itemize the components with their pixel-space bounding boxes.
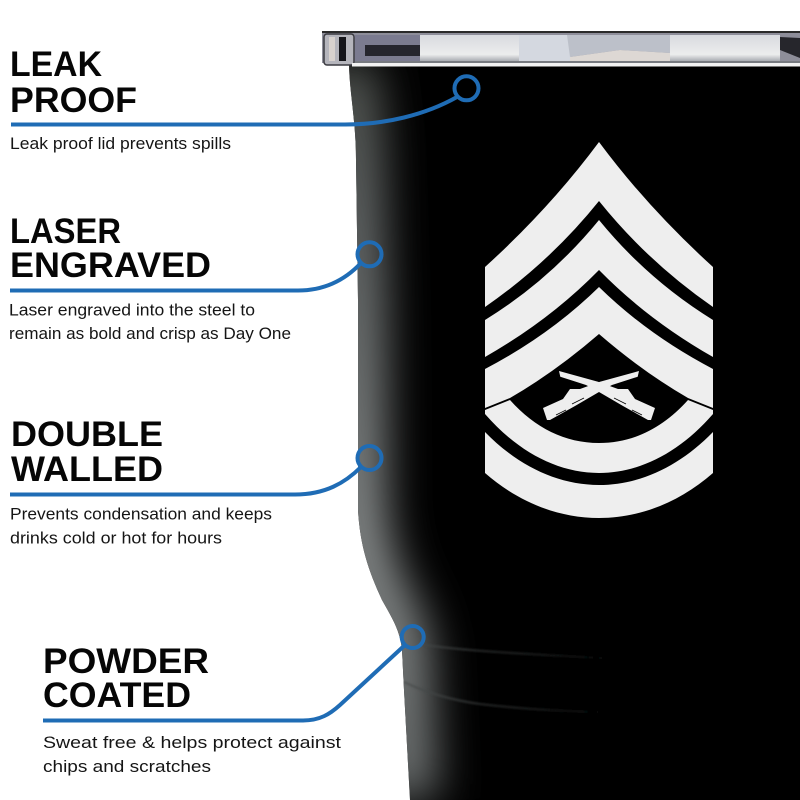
chevron 2 [485, 220, 713, 357]
chevron insignia [485, 142, 713, 518]
text: laser engraved: Laser engraved into the steel to [9, 302, 255, 320]
arc 1 [485, 400, 713, 473]
callout: double walled [10, 415, 382, 548]
text: laser engraved [9, 302, 291, 343]
chevron 3 [485, 287, 713, 408]
marker: leak proof [454, 76, 478, 100]
heading: laser engraved: ENGRAVED [10, 246, 211, 285]
text: double walled [10, 506, 272, 548]
heading: double walled: WALLED [11, 450, 163, 489]
marker: laser engraved [358, 242, 382, 266]
marker: powder coated [402, 626, 424, 648]
heading: powder coated: COATED [43, 676, 191, 715]
heading: powder coated [43, 642, 209, 715]
text: leak proof: Leak proof lid prevents spills [10, 135, 231, 153]
text: powder coated [43, 734, 341, 776]
heading: laser engraved: LASER [10, 212, 121, 251]
connector: double walled [10, 467, 361, 494]
marker: double walled [358, 446, 382, 470]
text: powder coated: Sweat free & helps protect against [43, 734, 341, 752]
lid [322, 31, 800, 66]
connector: leak proof [11, 97, 457, 124]
heading: leak proof: PROOF [10, 81, 137, 120]
heading: double walled: DOUBLE [11, 415, 163, 454]
callout: leak proof [10, 45, 478, 153]
heading: laser engraved [10, 212, 211, 285]
connector: laser engraved [10, 263, 361, 290]
tumbler body [347, 62, 800, 800]
crossed rifles [543, 371, 655, 420]
arc 2 [485, 432, 713, 518]
text: powder coated: chips and scratches [43, 758, 211, 776]
connector: powder coated [43, 645, 405, 720]
heading: leak proof: LEAK [10, 45, 102, 84]
text: double walled: Prevents condensation and keeps [10, 506, 272, 524]
chevron 1 [485, 142, 713, 307]
heading: powder coated: POWDER [43, 642, 209, 681]
callout: powder coated [43, 626, 424, 776]
heading: double walled [11, 415, 163, 489]
heading: leak proof [10, 45, 137, 120]
text: laser engraved: remain as bold and crisp as Day One [9, 325, 291, 343]
text: double walled: drinks cold or hot for hours [10, 530, 222, 548]
callout: laser engraved [9, 212, 382, 343]
